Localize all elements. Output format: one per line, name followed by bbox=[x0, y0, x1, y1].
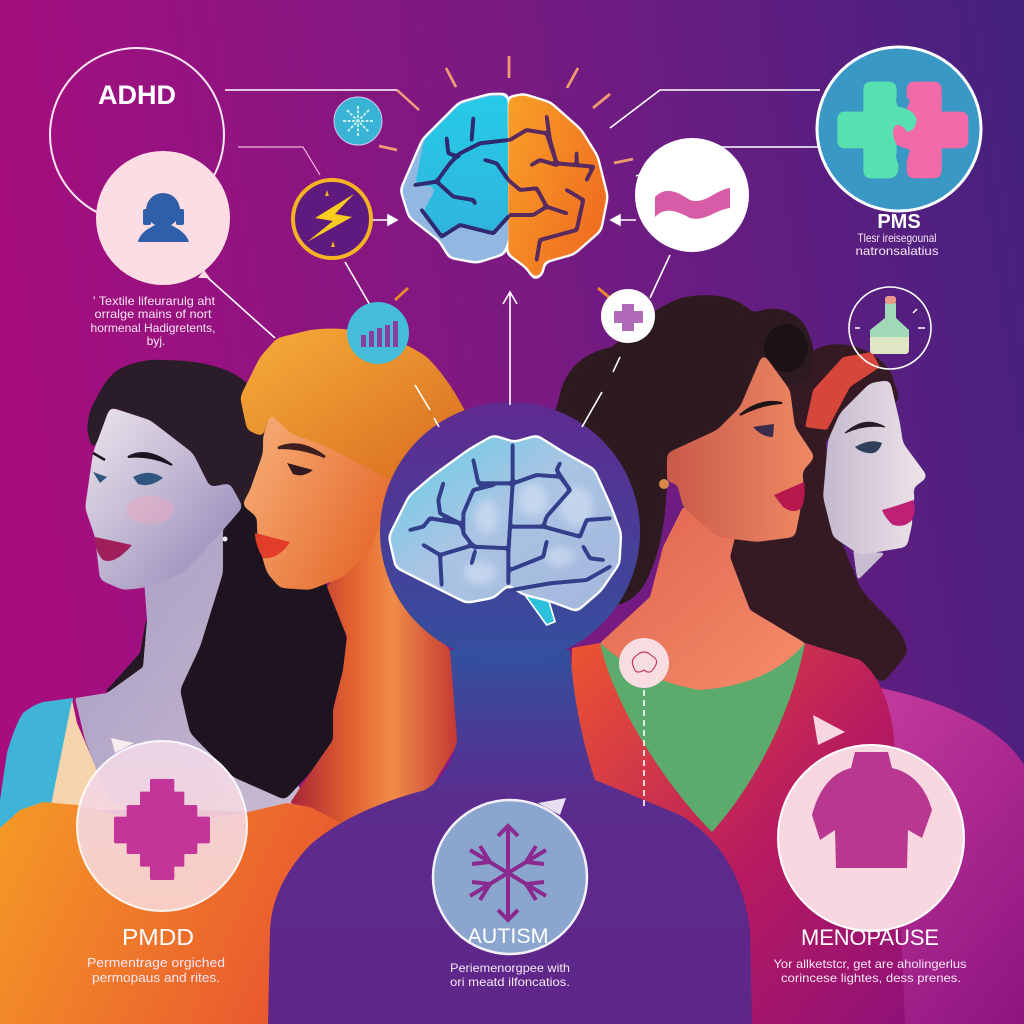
icon: shirt bbox=[812, 752, 932, 868]
figure: central silhouette with brain bbox=[268, 402, 752, 1024]
heading: AUTISM: AUTISM bbox=[468, 925, 548, 948]
brain: top two-colour bbox=[402, 95, 607, 278]
panel: puzzle icon bbox=[817, 47, 981, 211]
panel: ADHD bbox=[50, 48, 224, 222]
text: ADHD description: ' Textile lifeurarulg aht bbox=[93, 294, 216, 308]
arrow: wave to brain bbox=[611, 215, 636, 225]
text: PMDD description: permopaus and rites. bbox=[92, 970, 220, 985]
icon: bar badge bbox=[347, 302, 409, 364]
text: MENOPAUSE description: Yor allketstcr, get are aholingerlus bbox=[774, 957, 966, 971]
figure: far right woman bbox=[730, 344, 1024, 1024]
arrow: bolt to brain bbox=[372, 215, 397, 225]
panel: AUTISM bbox=[433, 798, 587, 954]
icon: snowflake bbox=[470, 826, 546, 920]
text: PMDD description: Permentrage orgiched bbox=[87, 955, 225, 970]
rays around top brain bbox=[379, 56, 633, 300]
icon: bottle bbox=[849, 287, 931, 369]
text: ADHD description: orralge mains of nort bbox=[94, 307, 212, 321]
text: PMDD description bbox=[87, 955, 225, 985]
panel: MENOPAUSE bbox=[778, 715, 964, 931]
panel: PMDD bbox=[77, 738, 247, 911]
heading: PMS: PMS bbox=[877, 211, 921, 233]
text: MENOPAUSE description bbox=[774, 957, 966, 985]
text: AUTISM description bbox=[450, 961, 570, 989]
text: PMS description: Tlesr ireisegounal bbox=[858, 231, 936, 245]
text: ADHD description: byj. bbox=[147, 334, 165, 348]
text: MENOPAUSE description: corincese lightes, dess prenes. bbox=[781, 971, 961, 985]
brain: central bbox=[390, 437, 620, 625]
text: PMS description: natronsalatius bbox=[856, 244, 938, 258]
arrow: up to top brain bbox=[503, 292, 517, 405]
icon: lightning bolt bbox=[293, 180, 371, 258]
icon: small snowflake badge bbox=[334, 97, 382, 145]
text: ADHD description bbox=[90, 294, 216, 348]
connector lines bbox=[207, 90, 830, 810]
figure: right woman bbox=[540, 295, 905, 1024]
figure: left woman bbox=[0, 360, 347, 860]
icon: person with headset bbox=[96, 151, 230, 285]
text: AUTISM description: Periemenorgpee with bbox=[450, 961, 570, 975]
icon: puzzle pieces bbox=[837, 82, 968, 178]
text: ADHD description: hormenal Hadigretents, bbox=[90, 321, 216, 335]
text: AUTISM description: ori meatd ilfoncatios. bbox=[450, 975, 570, 989]
icon: PMDD blob bbox=[116, 781, 208, 878]
icon: hormone wave bbox=[635, 138, 749, 252]
heading: PMDD: PMDD bbox=[122, 924, 194, 950]
heading: ADHD: ADHD bbox=[98, 80, 176, 110]
heading: MENOPAUSE: MENOPAUSE bbox=[801, 925, 939, 950]
text: PMS description bbox=[856, 231, 938, 258]
icon: chest flower marker bbox=[619, 638, 669, 688]
icon: small plus bbox=[601, 289, 655, 343]
figure: orange-haired woman bbox=[0, 329, 468, 1024]
